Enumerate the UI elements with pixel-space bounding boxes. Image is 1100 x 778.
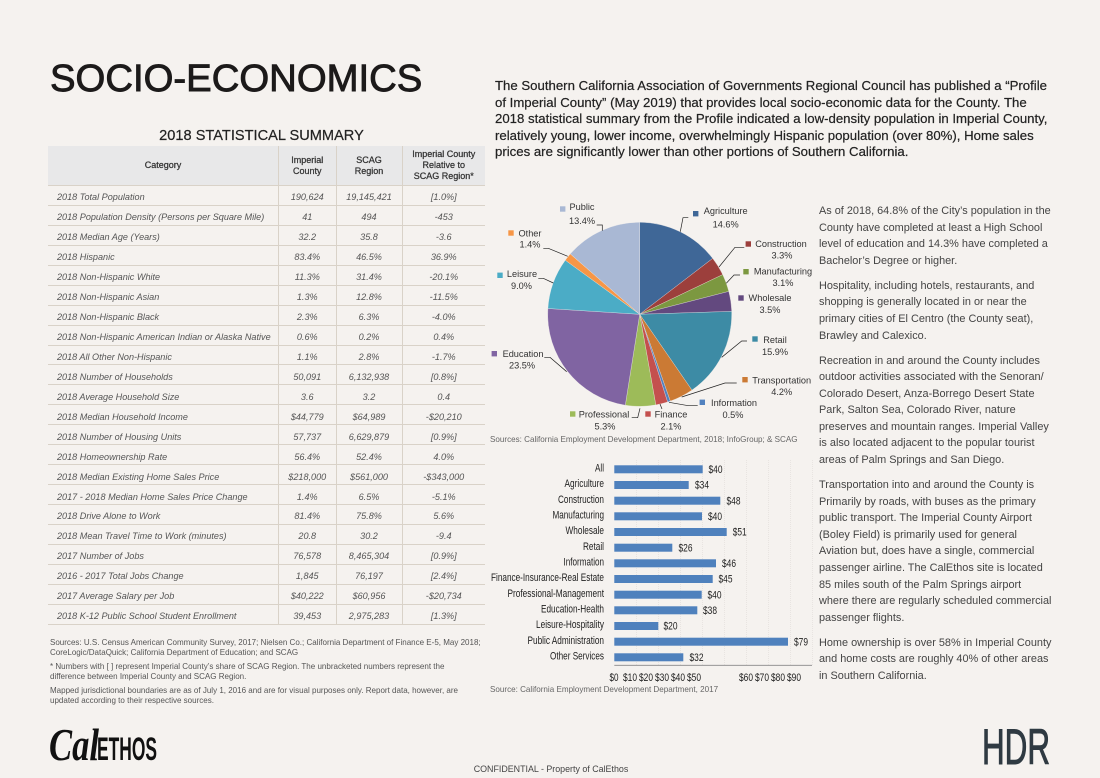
statistical summary table: [0.8%]: [431, 372, 457, 382]
statistical summary table: 12.8%: [356, 292, 382, 302]
body text column: primary cities of El Centro (the County seat),: [819, 313, 1033, 325]
pie chart: employment by sector: 3.5%: [760, 305, 780, 315]
pie chart: employment by sector: Education: [503, 349, 543, 359]
statistical summary table: 0.2%: [359, 332, 379, 342]
bar chart: average salary by sector: $40: [708, 464, 722, 476]
statistical summary table: 2018 Median Household Income: [57, 412, 188, 422]
statistical summary table: 19,145,421: [346, 192, 392, 202]
bar chart: average salary by sector: Education-Health: [541, 604, 604, 616]
statistical summary table: 2018 Total Population: [57, 192, 145, 202]
statistical summary table: 2017 - 2018 Median Home Sales Price Change: [57, 492, 248, 502]
statistical summary table: 6.3%: [359, 312, 379, 322]
bar chart: average salary by sector: Finance-Insurance-Real Estate: [491, 572, 604, 584]
pie chart source: Sources: California Employment Development Department, 2018; InfoGroup; & SCAG: [490, 435, 798, 444]
body text column: (Boley Field) is primarily used for general: [819, 529, 1017, 541]
bar chart: average salary by sector: $79: [794, 636, 808, 648]
bar chart: average salary by sector: $34: [695, 480, 709, 492]
table notes: Sources: U.S. Census American Community Survey, 2017; Nielsen Co.; California Department of Finance E-5, May 2018;: [50, 638, 481, 646]
statistical summary table: [1.0%]: [431, 192, 457, 202]
body text column: [819, 205, 1052, 682]
table notes: [50, 638, 481, 705]
statistical summary table: 2018 Hispanic: [57, 252, 115, 262]
statistical summary table: 2018 Drive Alone to Work: [57, 511, 160, 521]
statistical summary table: [0.9%]: [431, 432, 457, 442]
bar chart: average salary by sector: Information: [564, 556, 604, 568]
statistical summary table: 76,578: [293, 551, 321, 561]
statistical summary table: 2018 Homeownership Rate: [57, 452, 167, 462]
bar chart: average salary by sector: $26: [678, 542, 692, 554]
statistical summary table: 83.4%: [294, 252, 320, 262]
intro paragraph: [495, 78, 1047, 159]
body text column: passenger flights.: [819, 612, 904, 624]
statistical summary table: 46.5%: [356, 252, 382, 262]
statistical summary table: $64,989: [353, 412, 385, 422]
statistical summary table: Region: [355, 166, 383, 176]
table notes: difference between Imperial County and SCAG Region.: [50, 672, 246, 681]
statistical summary table: $218,000: [288, 472, 326, 482]
pie chart: employment by sector: Retail: [763, 335, 787, 345]
statistical summary table: 52.4%: [356, 452, 382, 462]
pie chart: employment by sector: [492, 202, 812, 431]
body text column: shopping is generally located in or near the: [819, 296, 1027, 308]
pie chart: employment by sector: Transportation: [752, 375, 811, 385]
statistical summary table: 76,197: [355, 571, 383, 581]
body text column: 85 miles south of the Palm Springs airport: [819, 579, 1021, 591]
statistical summary table: 5.6%: [433, 511, 454, 521]
statistical summary table: 57,737: [293, 432, 321, 442]
pie chart: employment by sector: 2.1%: [661, 421, 681, 431]
pie chart: employment by sector: Manufacturing: [754, 266, 812, 276]
statistical summary table: 31.4%: [356, 272, 382, 282]
statistical summary table: -11.5%: [430, 292, 458, 302]
statistical summary table: 3.2: [363, 392, 375, 402]
pie chart: employment by sector: 13.4%: [569, 216, 595, 226]
statistical summary table: 2.8%: [359, 352, 379, 362]
statistical summary table: 0.4%: [433, 332, 454, 342]
statistical summary table: 494: [361, 212, 377, 222]
pie chart: employment by sector: 4.2%: [771, 387, 792, 397]
statistical summary table: -3.6: [436, 232, 452, 242]
pie chart: employment by sector: 5.3%: [595, 421, 615, 431]
pie chart: employment by sector: 15.9%: [762, 347, 788, 357]
statistical summary table: 20.8: [298, 531, 316, 541]
body text column: Recreation in and around the County includes: [819, 355, 1040, 367]
pie chart: employment by sector: Agriculture: [704, 206, 748, 216]
statistical summary table: 190,624: [291, 192, 324, 202]
intro paragraph: 2018 statistical summary from the Profile indicated a low-density population in Imperial County,: [495, 111, 1047, 126]
body text column: Home ownership is over 58% in Imperial County: [819, 637, 1051, 649]
statistical summary table: -1.7%: [432, 352, 456, 362]
statistical summary table: -453: [435, 212, 453, 222]
statistical summary table: 0.4: [437, 392, 450, 402]
bar chart source: Source: California Employment Development Department, 2017: [490, 685, 718, 694]
bar chart: average salary by sector: $45: [718, 574, 732, 586]
body text column: is also located adjacent to the popular tourist: [819, 437, 1035, 449]
body text column: Primarily by roads, with buses as the primary: [819, 496, 1036, 508]
body text column: Park, Salton Sea, Colorado River, nature: [819, 404, 1016, 416]
statistical summary table: -5.1%: [432, 492, 456, 502]
statistical summary table: [48, 146, 485, 625]
statistical summary table: 2018 Non-Hispanic American Indian or Alaska Native: [57, 332, 271, 342]
body text column: areas of Palm Springs and San Diego.: [819, 454, 1004, 466]
statistical summary table: 36.9%: [431, 252, 457, 262]
bar chart: average salary by sector: Agriculture: [564, 478, 604, 490]
intro paragraph: prices are significantly lower than other portions of Southern California.: [495, 144, 908, 159]
statistical summary table: 2018 Non-Hispanic Asian: [57, 292, 159, 302]
statistical summary table: 2018 Mean Travel Time to Work (minutes): [57, 531, 227, 541]
statistical summary table: 4.0%: [433, 452, 454, 462]
statistical summary table: Relative to: [422, 160, 465, 170]
pie chart: employment by sector: Information: [711, 398, 757, 408]
bar chart: average salary by sector: $40: [671, 672, 685, 684]
pie chart: employment by sector: Professional: [579, 409, 629, 419]
bar chart: average salary by sector: $20: [664, 621, 678, 633]
body text column: passenger airline. The CalEthos site is located: [819, 562, 1043, 574]
statistical summary table: Imperial County: [412, 149, 475, 159]
body text column: in Southern California.: [819, 670, 927, 682]
bar chart: average salary by sector: $40: [708, 589, 722, 601]
bar chart: average salary by sector: $50: [687, 672, 701, 684]
body text column: level of education and 14.3% have completed a: [819, 238, 1048, 250]
statistical summary table: 2018 Number of Households: [57, 372, 173, 382]
statistical summary table: 30.2: [360, 531, 378, 541]
pie chart: employment by sector: Other: [519, 228, 541, 238]
statistical summary table: Category: [145, 160, 181, 170]
bar chart: average salary by sector: Construction: [558, 494, 604, 506]
statistical summary table: 75.8%: [356, 511, 382, 521]
body text column: Hospitality, including hotels, restaurants, and: [819, 280, 1034, 292]
statistical summary table: 2016 - 2017 Total Jobs Change: [57, 571, 184, 581]
body text column: As of 2018, 64.8% of the City’s population in the: [819, 205, 1051, 217]
body text column: where there are regularly scheduled commercial: [819, 595, 1051, 607]
bar chart: average salary by sector: Wholesale: [566, 525, 604, 537]
statistical summary table: 41: [302, 212, 312, 222]
pie chart: employment by sector: Construction: [755, 239, 807, 249]
statistical summary table: -20.1%: [429, 272, 458, 282]
statistical summary table: Imperial: [291, 154, 323, 164]
statistical summary table: SCAG Region*: [414, 171, 474, 181]
statistical summary table: 2018 Number of Housing Units: [57, 432, 181, 442]
statistical summary table: 2017 Average Salary per Job: [57, 591, 174, 601]
statistical summary table: 32.2: [298, 232, 316, 242]
body text column: County have completed at least a High School: [819, 222, 1042, 234]
bar chart: average salary by sector: $90: [787, 672, 801, 684]
title: SOCIO-ECONOMICS: [50, 57, 422, 100]
bar chart: average salary by sector: Other Services: [550, 650, 604, 662]
pie chart: employment by sector: Finance: [655, 409, 687, 419]
table notes: * Numbers with [ ] represent Imperial County’s share of SCAG Region. The unbracketed numbers represent the: [50, 662, 444, 671]
body text column: Transportation into and around the County is: [819, 479, 1034, 491]
bar chart: average salary by sector: Manufacturing: [552, 510, 604, 522]
statistical summary table: 1.1%: [297, 352, 318, 362]
statistical summary table: SCAG: [356, 154, 382, 164]
bar chart: average salary by sector: $40: [708, 511, 722, 523]
statistical summary table: 2,975,283: [349, 611, 389, 621]
statistical summary table: 2018 Non-Hispanic Black: [57, 312, 159, 322]
bar chart: average salary by sector: $30: [655, 672, 669, 684]
intro paragraph: relatively young, lower income, overwhelmingly Hispanic population (over 80%), Home sales: [495, 128, 1034, 142]
intro paragraph: of Imperial County” (May 2019) that provides local socio-economic data for the County. The: [495, 94, 1027, 110]
statistical summary table: 6.5%: [359, 492, 379, 502]
statistical summary table: 11.3%: [295, 272, 320, 282]
statistical summary table: 2018 All Other Non-Hispanic: [57, 352, 172, 362]
statistical summary table: 2.3%: [297, 312, 318, 322]
pie chart: employment by sector: 1.4%: [520, 240, 540, 250]
bar chart: average salary by sector: $0: [610, 672, 618, 684]
bar chart: average salary by sector: $32: [690, 652, 704, 664]
bar chart: average salary by sector: $10: [623, 672, 637, 684]
pie chart: employment by sector: 3.1%: [773, 278, 793, 288]
bar chart: average salary by sector: $70: [755, 672, 769, 684]
bar chart: average salary by sector: $51: [733, 527, 747, 539]
statistical summary table: 1,845: [296, 571, 319, 581]
statistical summary table: County: [293, 166, 322, 176]
bar chart: average salary by sector: Public Administration: [528, 635, 604, 647]
table heading: 2018 STATISTICAL SUMMARY: [159, 128, 364, 144]
statistical summary table: 2018 K-12 Public School Student Enrollment: [57, 611, 236, 621]
pie chart: employment by sector: Wholesale: [749, 293, 791, 303]
statistical summary table: -4.0%: [432, 312, 456, 322]
statistical summary table: 2017 Number of Jobs: [57, 551, 144, 561]
logo: CalEthos: [49, 722, 157, 768]
statistical summary table: 3.6: [301, 392, 314, 402]
statistical summary table: -9.4: [436, 531, 452, 541]
statistical summary table: 2018 Non-Hispanic White: [57, 272, 160, 282]
body text column: Colorado Desert, Anza-Borrego Desert State: [819, 388, 1034, 400]
bar chart: average salary by sector: $80: [771, 672, 785, 684]
statistical summary table: 50,091: [293, 372, 321, 382]
pie chart: employment by sector: Leisure: [507, 269, 537, 279]
pie chart: employment by sector: 14.6%: [713, 220, 739, 230]
statistical summary table: $44,779: [291, 412, 324, 422]
statistical summary table: [1.3%]: [431, 611, 457, 621]
bar chart: average salary by sector: $46: [722, 558, 736, 570]
statistical summary table: 2018 Average Household Size: [57, 392, 179, 402]
statistical summary table: -$20,734: [426, 591, 462, 601]
statistical summary table: 6,629,879: [349, 432, 389, 442]
bar chart: average salary by sector: Leisure-Hospitality: [536, 619, 604, 631]
table notes: Mapped jurisdictional boundaries are as of July 1, 2016 and are for visual purposes only. Report data, however, are: [50, 686, 458, 695]
statistical summary table: 2018 Population Density (Persons per Square Mile): [57, 212, 264, 222]
statistical summary table: 8,465,304: [349, 551, 389, 561]
statistical summary table: 6,132,938: [349, 372, 389, 382]
body text column: Bachelor’s Degree or higher.: [819, 255, 957, 267]
body text column: and home costs are roughly 40% of other areas: [819, 653, 1048, 665]
footer: CONFIDENTIAL - Property of CalEthos: [474, 764, 628, 774]
bar chart: average salary by sector: Retail: [583, 541, 604, 553]
statistical summary table: [0.9%]: [431, 551, 457, 561]
body text column: preserves and mountain ranges. Imperial Valley: [819, 421, 1049, 433]
pie chart: employment by sector: 9.0%: [511, 281, 532, 291]
statistical summary table: -$20,210: [426, 412, 462, 422]
bar chart: average salary by sector: $60: [739, 672, 753, 684]
bar chart: average salary by sector: Professional-Management: [508, 588, 604, 600]
statistical summary table: 81.4%: [294, 511, 320, 521]
statistical summary table: $561,000: [350, 472, 388, 482]
statistical summary table: 56.4%: [294, 452, 320, 462]
body text column: public transport. The Imperial County Airport: [819, 512, 1032, 524]
statistical summary table: 2018 Median Existing Home Sales Price: [57, 472, 219, 482]
bar chart: average salary by sector: [491, 460, 812, 684]
bar chart: average salary by sector: $38: [703, 605, 717, 617]
statistical summary table: 1.3%: [297, 292, 318, 302]
bar chart: average salary by sector: $48: [726, 495, 740, 507]
statistical summary table: $60,956: [353, 591, 385, 601]
statistical summary table: $40,222: [291, 591, 324, 601]
body text column: Brawley and Calexico.: [819, 330, 927, 342]
body text column: Aviation but, does have a single, commercial: [819, 545, 1034, 557]
pie chart: employment by sector: Public: [569, 202, 595, 212]
intro paragraph: The Southern California Association of Governments Regional Council has published a “Profile: [495, 78, 1047, 93]
table notes: updated according to their respective sources.: [50, 696, 214, 705]
bar chart: average salary by sector: All: [595, 462, 604, 474]
statistical summary table: 2018 Median Age (Years): [57, 232, 160, 242]
body text column: outdoor activities associated with the Senoran/: [819, 371, 1044, 383]
pie chart: employment by sector: 3.3%: [772, 250, 792, 260]
statistical summary table: [2.4%]: [431, 571, 457, 581]
statistical summary table: 35.8: [360, 232, 378, 242]
table notes: CoreLogic/DataQuick; California Department of Education; and SCAG: [50, 648, 298, 656]
pie chart: employment by sector: 0.5%: [723, 410, 743, 420]
pie chart: employment by sector: 23.5%: [509, 361, 535, 371]
statistical summary table: 0.6%: [297, 332, 318, 342]
statistical summary table: 1.4%: [297, 492, 318, 502]
statistical summary table: 39,453: [293, 611, 321, 621]
statistical summary table: -$343,000: [423, 472, 464, 482]
bar chart: average salary by sector: $20: [639, 672, 653, 684]
